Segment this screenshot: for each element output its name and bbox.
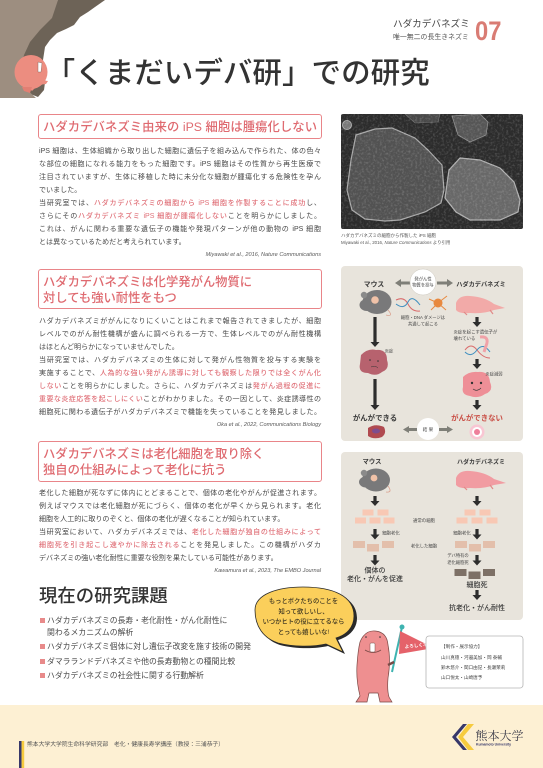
icon: mild inflammation blob (463, 372, 491, 397)
icon: mouse (360, 290, 392, 315)
photo: iPS cell colonies (341, 114, 523, 229)
footer affiliation: 熊本大学大学院生命科学研究部 老化・健康長寿学講座（教授：三浦恭子） (27, 742, 224, 748)
bullet (40, 618, 45, 623)
section 2 body text: しないことを明らかにしました。さらに、ハダカデバネズミは発がん過程の促進に (39, 383, 321, 390)
speech bubble: 知って欲しいし、 (278, 606, 329, 616)
label: NMR-specific cell death: デバ特有の (447, 552, 469, 559)
bullet (40, 644, 45, 649)
section 2 body text: 当研究室では、ハダカデバネズミの生体に対して発がん性物質を投与する実験を (39, 357, 321, 364)
text: cell death: 細胞死 (466, 580, 488, 589)
text: broken gene: 炎症を起こす遺伝子が (454, 328, 498, 336)
section 1 heading: ハダカデバネズミ由来の iPS 細胞は腫瘍化しない (43, 120, 317, 134)
section 1 body text: さらにそのハダカデバネズミ iPS 細胞が腫瘍化しないことを明らかにしました。 (39, 213, 321, 220)
series subtitle: 唯一無二の長生きネズミ (393, 34, 469, 41)
result circle (417, 418, 439, 440)
section 2 heading (38, 269, 322, 309)
section 1 body text: でいました。 (39, 187, 81, 194)
section 3 heading: ハダカデバネズミは老化細胞を取り除く (43, 446, 264, 460)
labels: cellular senescence: 細胞老化 (453, 530, 471, 536)
series title: ハダカデバネズミ (393, 19, 470, 30)
panel: carcinogen resistance diagram (341, 266, 523, 441)
Kumamoto University logo: Kumamoto University (476, 742, 511, 746)
label: normal cells: 通常の細胞 (413, 517, 436, 524)
icon: inflamed blob (360, 350, 388, 375)
section 1 heading (38, 114, 322, 139)
label: inflammation: 炎症 (385, 348, 394, 354)
label: reduced inflammation: 炎症減弱 (485, 370, 503, 378)
section 2 body text (39, 317, 321, 416)
mascot with flag (356, 624, 434, 702)
photo caption: Miyawaki et al., 2016, Nature Communications より引用 (341, 240, 450, 245)
text: broken gene (454, 328, 498, 342)
mascot peeking from rock (14, 55, 48, 93)
text: broken gene: 壊れている (454, 335, 475, 342)
credits box (426, 636, 523, 688)
label: mouse: マウス (364, 280, 384, 288)
section 2 body text: 重要な炎症応答を起こしにくいことがわかりました。その一因として、炎症誘導性の (39, 396, 321, 403)
icon: tumor (368, 425, 385, 438)
photo caption: ハダカデバネズミの細胞から作製した iPS 細胞 (341, 233, 436, 238)
Kumamoto University logo (452, 724, 524, 750)
icon: naked mole rat (456, 296, 505, 315)
section 3 citation: Kawamura et al., 2023, The EMBO Journal (214, 568, 321, 574)
normal cells (355, 510, 498, 524)
arrows: mole rat path (472, 317, 482, 410)
arrows: mouse path (370, 496, 380, 566)
section 3 heading: 独自の仕組みによって老化に抗う (43, 463, 226, 477)
result: cancer forms: がんができる (353, 414, 397, 422)
section 1 body text (39, 147, 321, 246)
topic 4: ハダカデバネズミの社会性に関する行動解析 (47, 671, 204, 680)
section 2 body text: はほとんど明らかになっていませんでした。 (39, 344, 179, 351)
label: NMR-specific cell death: 老化細胞死 (447, 559, 469, 566)
senescent cells (353, 541, 495, 552)
bullet (40, 673, 45, 678)
topic 1: 関わるメカニズムの解析 (47, 628, 133, 636)
carcinogen circle: 発がん性 (414, 276, 432, 282)
dying cells (454, 569, 495, 579)
text: DNA damage common (401, 314, 446, 328)
speech bubble: いつかヒトの役に立てるなら (263, 616, 344, 626)
icon: broken DNA (465, 337, 490, 358)
section 1 body text: iPS 細胞は、生体組織から取り出した細胞に遺伝子を組み込んで作られた、体の色々 (39, 148, 321, 155)
carcinogen circle (410, 269, 436, 295)
footer band (0, 705, 543, 768)
photo caption (341, 232, 450, 245)
section 3 body text (39, 489, 321, 562)
section 3 body text: デバネズミの強い老化耐性に重要な役割を果たしている可能性があります。 (39, 555, 278, 562)
section 2 body text: ハダカデバネズミががんになりにくいことはこれまで報告されてきましたが、細胞 (39, 318, 321, 325)
Kumamoto University logo: 熊本大学 (476, 728, 524, 743)
topic 1: ハダカデバネズミの長寿・老化耐性・がん化耐性に (47, 616, 227, 624)
labels: cellular senescence: 細胞老化 (382, 530, 400, 536)
credits box: 鈴木悠介・関口由記・長瀬茉莉 (441, 664, 506, 671)
research topic list (40, 616, 251, 680)
arrows: mouse path (370, 317, 380, 410)
credits box: 【制作・展示協力】 (441, 643, 482, 650)
icon: naked mole rat (456, 471, 506, 490)
label: senescent cells: 老化した細胞 (411, 542, 438, 550)
footer accent bar (19, 741, 24, 768)
section 1 body text: とは異なっているためだと考えられています。 (39, 239, 186, 246)
section 3 body text: 当研究室において、ハダカデバネズミでは、老化した細胞が独自の仕組みによって (39, 529, 321, 536)
carcinogen circle: 物質を投与 (412, 282, 434, 288)
icon: healthy cell (470, 424, 484, 440)
icon: damaged cell (429, 296, 447, 310)
topic 1 (47, 616, 227, 636)
result: mouse (347, 566, 403, 583)
section 3 body text: 老化した細胞が死なずに体内にとどまることで、個体の老化やがんが促進されます。 (39, 490, 321, 497)
section 1 body text: な部位の細胞になれる能力をもった細胞です。iPS 細胞はその性質から再生医療で (39, 161, 321, 168)
section 1 body text: 当研究室では、ハダカデバネズミの細胞から iPS 細胞を作製することに成功し、 (39, 200, 321, 207)
icon: mouse (359, 468, 390, 492)
result: no cancer: がんができない (451, 414, 503, 422)
topic 2: ハダカデバネズミ個体に対し遺伝子改変を施す技術の開発 (47, 642, 251, 651)
section 2 heading: 対しても強い耐性をもつ (43, 291, 177, 305)
speech bubble: とっても嬉しいな! (278, 627, 329, 636)
topic 3: ダマラランドデバネズミや他の長寿動物との種間比較 (47, 657, 235, 666)
section 3 body text: 例えばマウスでは老化細胞が死にづらく、個体の老化が早くから見られます。老化 (39, 503, 321, 510)
panel: senescent cell diagram (341, 452, 523, 620)
text: DNA damage common: 共通して起こる (408, 320, 438, 328)
result: mouse: 個体の (364, 566, 386, 574)
label: naked mole rat: ハダカデバネズミ (457, 458, 505, 466)
section 2 body text: 実施することで、人為的な強い発がん誘導に対しても観察した限りでは全くがん化 (39, 370, 321, 377)
mascot with flag: よろしくネ! (404, 641, 430, 650)
text: DNA damage common: 細胞・DNA ダメージは (401, 314, 446, 321)
section 2 body text: 細胞死に関わる遺伝子がハダカデバネズミで機能を失っていることを発見しました。 (39, 409, 321, 416)
section 3 heading (38, 441, 322, 482)
label: naked mole rat: ハダカデバネズミ (456, 280, 506, 288)
section 2 heading: ハダカデバネズミは化学発がん物質に (43, 274, 252, 288)
result circle: 結 果 (423, 426, 434, 433)
current research heading: 現在の研究課題 (39, 585, 168, 606)
section 1 citation: Miyawaki et al., 2016, Nature Communications (206, 252, 321, 258)
speech bubble (255, 587, 357, 654)
arrows: result (403, 426, 453, 433)
section 1 body text: これは、がんに関わる重要な遺伝子の機能や発現パターンが他の動物の iPS 細胞 (39, 226, 321, 233)
section 3 body text: 細胞を人工的に取りのぞくと、個体の老化が遅くなることが知られています。 (39, 516, 284, 523)
section 1 body text: 注目されていますが、生体に移植した時に未分化な細胞が腫瘍化する危険性を孕ん (39, 174, 321, 181)
arrows: mole rat path (472, 496, 482, 600)
result: mouse: 老化・がんを促進 (347, 574, 403, 583)
arrows: carcinogen both ways (395, 279, 453, 287)
icon: DNA damage (396, 299, 420, 311)
section 2 body text: レベルでのがん耐性機構が盛んに調べられる一方で、生体レベルでのがん耐性機構 (39, 331, 321, 338)
section 3 body text: 細胞死を引き起こし速やかに除去されることを発見しました。この機構がハダカ (39, 542, 321, 549)
credits box: 山川真徳・河邉美加・岡 泰輔 (441, 654, 502, 661)
label: mouse: マウス (363, 456, 381, 466)
result: anti-aging: 抗老化・がん耐性 (449, 603, 505, 612)
bullet (40, 659, 45, 664)
credits box: 山口悦太・山崎唐予 (441, 674, 483, 681)
speech bubble: もっとボクたちのことを (269, 597, 338, 605)
section 2 citation: Oka et al., 2022, Communications Biology (217, 422, 321, 428)
main title: 「くまだいデバ研」での研究 (46, 57, 430, 90)
rock illustration (0, 0, 105, 98)
labels: cellular senescence (382, 530, 471, 536)
label: NMR-specific cell death (447, 552, 469, 566)
issue number: 07 (475, 16, 501, 46)
